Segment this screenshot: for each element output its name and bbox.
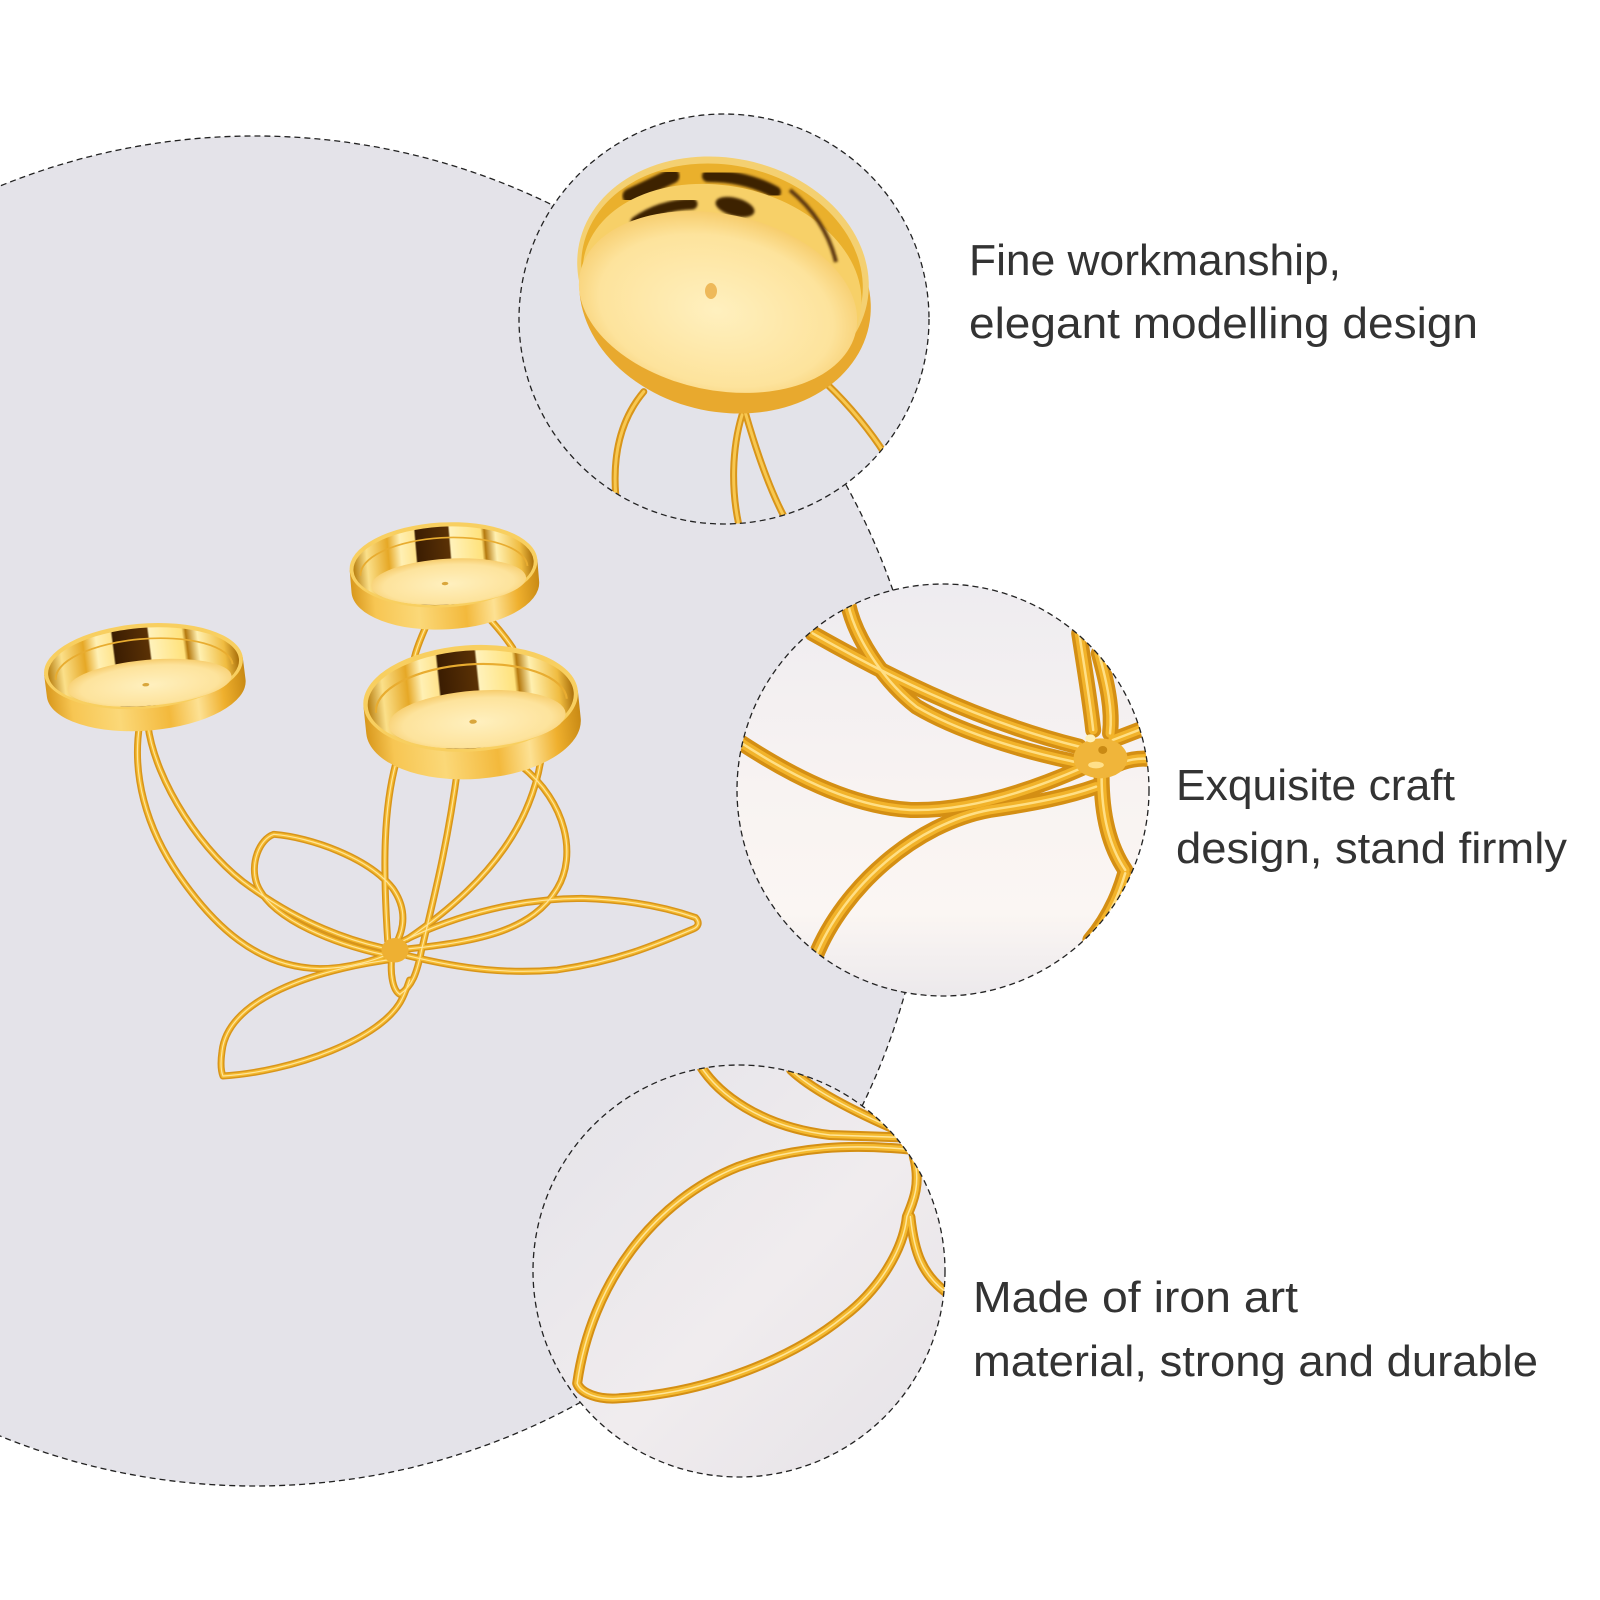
text block: material: material, strong and durable bbox=[973, 1337, 1538, 1386]
detail circle: petal loop close-up bbox=[533, 1065, 952, 1477]
text block: craft design: design, stand firmly bbox=[1176, 824, 1567, 873]
product photo: three-dish gold candle holder bbox=[39, 517, 698, 1076]
detail circle: welded hub close-up bbox=[737, 584, 1155, 996]
wire frame of the candle holder bbox=[137, 607, 698, 1076]
text block: craft design bbox=[1176, 761, 1567, 873]
front dish bbox=[358, 638, 586, 787]
back dish bbox=[346, 517, 543, 635]
text block: material bbox=[973, 1273, 1538, 1386]
text block: workmanship: Fine workmanship, bbox=[969, 236, 1341, 285]
text block: craft design: Exquisite craft bbox=[1176, 761, 1455, 810]
circle outline bbox=[737, 584, 1149, 996]
close-up petal wire bbox=[577, 1065, 952, 1399]
background: large dashed lilac circle bbox=[0, 136, 930, 1486]
text block: workmanship bbox=[969, 236, 1478, 348]
detail circle: dish close-up bbox=[519, 114, 929, 524]
text block: workmanship: elegant modelling design bbox=[969, 299, 1478, 348]
close-up dish and legs bbox=[577, 156, 884, 524]
circle outline bbox=[533, 1065, 945, 1477]
close-up wires and hub bbox=[737, 603, 1155, 957]
text block: material: Made of iron art bbox=[973, 1273, 1298, 1322]
circle outline bbox=[519, 114, 929, 524]
left dish bbox=[39, 615, 251, 739]
